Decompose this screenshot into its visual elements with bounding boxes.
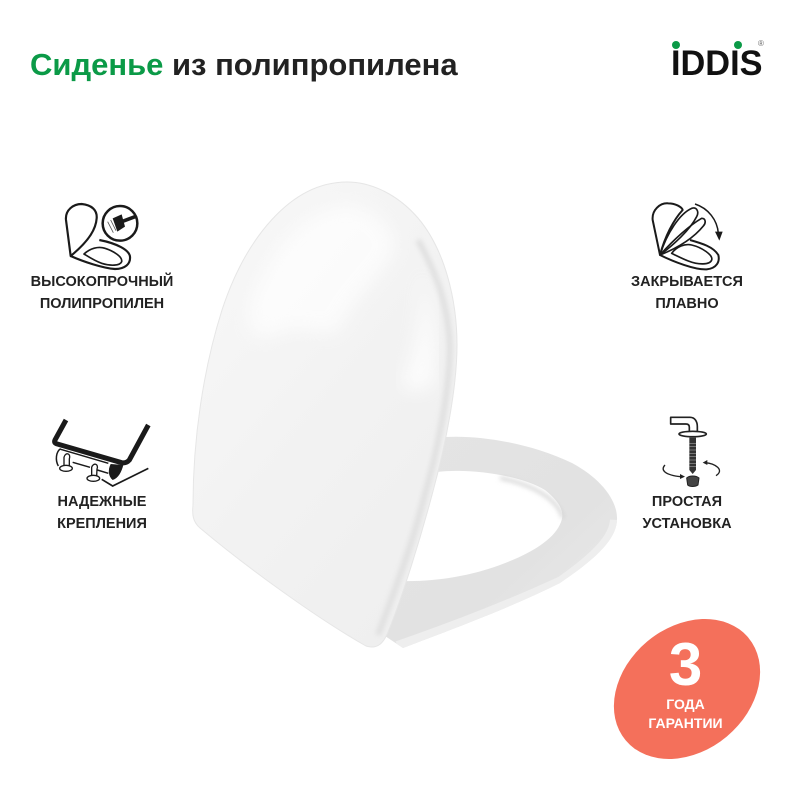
label: high-strength polypropylene: ПОЛИПРОПИЛЕН	[40, 296, 164, 312]
warranty text: ГАРАНТИИ	[648, 715, 723, 731]
title: Сиденье из полипропилена	[30, 47, 458, 82]
label: reliable mounts	[57, 494, 147, 532]
label: high-strength polypropylene: ВЫСОКОПРОЧНЫЙ	[31, 274, 173, 290]
logo: IDDIS: IDDIS	[671, 44, 762, 83]
warranty badge	[614, 619, 760, 759]
label: reliable mounts: КРЕПЛЕНИЯ	[57, 516, 147, 532]
seat ring	[385, 437, 617, 648]
warranty text: ГОДА	[666, 696, 705, 712]
warranty number: 3	[669, 631, 702, 698]
label: closes softly: ЗАКРЫВАЕТСЯ	[631, 274, 743, 290]
warranty text	[648, 696, 723, 731]
seat lid	[193, 182, 457, 647]
label: simple installation: УСТАНОВКА	[642, 516, 732, 532]
label: simple installation: ПРОСТАЯ	[652, 494, 722, 510]
label: closes softly: ПЛАВНО	[655, 296, 719, 312]
icon: hinges	[52, 418, 150, 487]
logo: IDDIS: ®	[758, 39, 764, 48]
label: reliable mounts: НАДЕЖНЫЕ	[58, 494, 146, 510]
icon: soft close	[652, 202, 723, 270]
product illustration: toilet seat and lid	[192, 182, 617, 648]
label: simple installation	[642, 494, 732, 532]
icon: seat with hammer	[64, 202, 139, 270]
icon: bolt and nut	[662, 416, 720, 487]
label: high-strength polypropylene	[31, 272, 173, 312]
label: closes softly	[631, 274, 743, 312]
